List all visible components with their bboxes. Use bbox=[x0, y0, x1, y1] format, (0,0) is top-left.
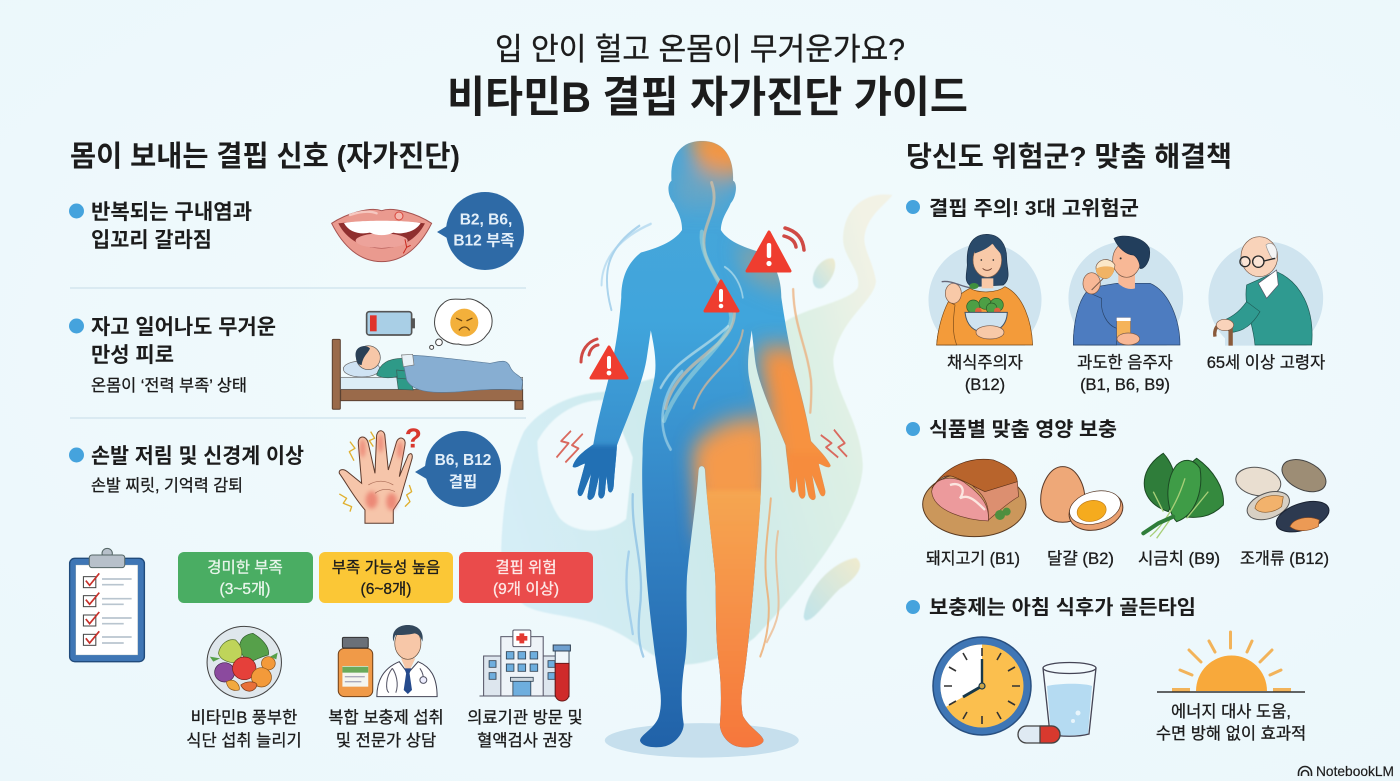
warning icon: left arm bbox=[581, 339, 627, 378]
motion waves around body bbox=[602, 224, 811, 656]
callout: B6 B12: 결핍 bbox=[449, 473, 477, 491]
icon: hospital and blood tube bbox=[479, 630, 570, 701]
body silhouette bbox=[560, 130, 850, 765]
status box: mild: 경미한 부족 bbox=[207, 558, 283, 576]
decorative background blob bbox=[501, 194, 892, 665]
label: vegetarian: 채식주의자 bbox=[947, 353, 1023, 372]
icon: clock bbox=[933, 637, 1031, 735]
icon: heavy drinker man bbox=[1068, 236, 1183, 346]
title: 입 안이 헐고 온몸이 무거운가요? bbox=[495, 32, 905, 67]
title: 비타민B 결핍 자가진단 가이드 bbox=[447, 74, 968, 122]
callout: B6 B12: B6, B12 bbox=[435, 452, 491, 469]
status box: likely: (6~8개) bbox=[361, 580, 411, 598]
icon: shellfish bbox=[1234, 453, 1333, 538]
subheading: foods: 식품별 맞춤 영양 보충 bbox=[929, 418, 1117, 441]
icon: question mark: ? bbox=[405, 422, 422, 453]
icon: clipboard checklist bbox=[70, 548, 144, 662]
label: spinach: 시금치 (B9) bbox=[1138, 549, 1220, 568]
icon: tired person in bed bbox=[332, 299, 523, 409]
signal 3 text bbox=[69, 445, 304, 495]
action label: diet: 식단 섭취 늘리기 bbox=[186, 731, 302, 750]
status box: mild: (3~5개) bbox=[220, 580, 270, 598]
icon: mouth with ulcer bbox=[332, 209, 432, 262]
icon: supplement bottle and doctor bbox=[338, 625, 437, 697]
icon: pork bbox=[923, 459, 1026, 537]
icon: low battery bbox=[367, 312, 415, 335]
signal 1 text: 반복되는 구내염과 bbox=[91, 201, 252, 224]
action label: supplement: 복합 보충제 섭취 bbox=[328, 708, 444, 727]
action label: supplement bbox=[328, 708, 444, 750]
signal 2 text: 만성 피로 bbox=[91, 344, 174, 367]
action label: hospital: 혈액검사 권장 bbox=[477, 731, 573, 750]
icon: rising sun bbox=[1157, 632, 1305, 692]
label: drinker: 과도한 음주자 bbox=[1077, 353, 1173, 372]
sun caption: 에너지 대사 도움, bbox=[1171, 702, 1291, 721]
label: pork: 돼지고기 (B1) bbox=[926, 549, 1020, 568]
action label: hospital bbox=[467, 708, 583, 750]
icon: elderly person with cane bbox=[1208, 237, 1323, 346]
numbness zigzags near hands bbox=[556, 430, 847, 462]
signal 3 text: 손발 저림 및 신경계 이상 bbox=[91, 445, 304, 468]
flowing streams inside torso bbox=[661, 183, 743, 449]
signal 1 text: 입꼬리 갈라짐 bbox=[91, 229, 212, 252]
callout: B2 B6 B12: B2, B6, bbox=[460, 212, 512, 228]
status box: likely bbox=[319, 552, 453, 603]
callout: B2 B6 B12: B12 부족 bbox=[453, 232, 515, 250]
watermark: NotebookLM: NotebookLM bbox=[1316, 763, 1394, 779]
action label: supplement: 및 전문가 상담 bbox=[336, 731, 436, 750]
warning icon: right shoulder bbox=[747, 228, 804, 271]
label: egg: 달걀 (B2) bbox=[1047, 549, 1114, 568]
panel: score guide bbox=[70, 548, 593, 750]
icon: tingling hand bbox=[339, 422, 422, 523]
action label: diet: 비타민B 풍부한 bbox=[191, 708, 297, 727]
callout: B6 B12 bbox=[415, 431, 501, 507]
sun caption bbox=[1156, 702, 1306, 743]
sun caption: 수면 방해 없이 효과적 bbox=[1156, 724, 1306, 743]
icon: capsule pill bbox=[1018, 726, 1060, 743]
label: vegetarian: (B12) bbox=[965, 376, 1005, 394]
label: shellfish: 조개류 (B12) bbox=[1240, 549, 1329, 568]
panel: self-diagnosis signals bbox=[69, 140, 526, 523]
label: vegetarian bbox=[947, 353, 1023, 394]
right heading: 당신도 위험군? 맞춤 해결책 bbox=[906, 141, 1232, 172]
action label: hospital: 의료기관 방문 및 bbox=[467, 708, 583, 727]
label: drinker bbox=[1077, 353, 1173, 394]
label: drinker: (B1, B6, B9) bbox=[1080, 376, 1170, 394]
status box: risk bbox=[459, 552, 593, 603]
warning icon: chest bbox=[705, 281, 738, 311]
label: elderly: 65세 이상 고령자 bbox=[1207, 353, 1325, 372]
icon: egg bbox=[1041, 467, 1127, 536]
icon: thought bubble with tired face bbox=[430, 299, 492, 349]
signal 3 text: 손발 찌릿, 기억력 감퇴 bbox=[91, 476, 243, 495]
signal 2 text: 자고 일어나도 무거운 bbox=[91, 316, 276, 339]
signal 2 text: 온몸이 ‘전력 부족’ 상태 bbox=[91, 376, 247, 395]
icon: food plate bbox=[207, 626, 281, 698]
action label: diet bbox=[186, 708, 302, 750]
status box: mild bbox=[178, 552, 313, 603]
signal 1 text bbox=[69, 201, 252, 252]
signal 2 text bbox=[69, 316, 276, 395]
left heading: 몸이 보내는 결핍 신호 (자가진단) bbox=[70, 140, 460, 173]
status box: risk: 결핍 위험 bbox=[495, 558, 557, 576]
panel: risk groups and solutions bbox=[906, 141, 1333, 743]
title bbox=[447, 32, 968, 122]
icon: spinach bbox=[1143, 453, 1223, 538]
callout: B2 B6 B12 bbox=[437, 192, 524, 270]
ground shadow bbox=[605, 723, 799, 758]
status box: likely: 부족 가능성 높음 bbox=[332, 558, 440, 576]
icon: vegetarian woman bbox=[928, 234, 1042, 346]
subheading: timing: 보충제는 아침 식후가 골든타임 bbox=[929, 596, 1196, 619]
status box: risk: (9개 이상) bbox=[493, 580, 559, 598]
icon: glass of water bbox=[1043, 662, 1096, 736]
human body illustration bbox=[501, 130, 892, 765]
subheading: high-risk groups: 결핍 주의! 3대 고위험군 bbox=[929, 197, 1139, 220]
